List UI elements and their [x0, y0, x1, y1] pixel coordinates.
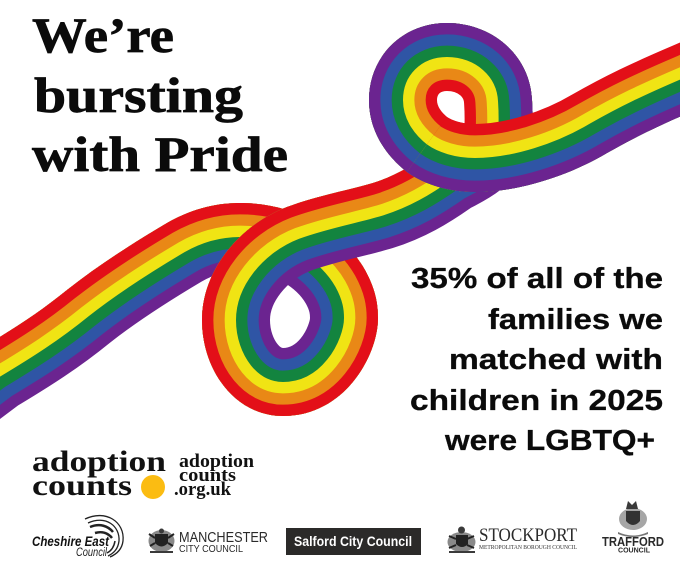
logo: Cheshire East Council [32, 516, 123, 559]
logo: Cheshire East Council: Cheshire East [32, 534, 109, 549]
website address: counts [179, 466, 236, 486]
icon: Trafford crest [618, 501, 648, 537]
logo: Manchester City Council: CITY COUNCIL [179, 543, 243, 555]
logo: Manchester City Council [148, 528, 268, 555]
logo: Trafford Council: COUNCIL [618, 548, 651, 554]
adoption counts logo [32, 445, 166, 502]
logo: Manchester City Council: MANCHESTER [179, 529, 268, 546]
statistic text: matched with [449, 344, 663, 376]
title: We’re [32, 7, 174, 63]
logo: Trafford Council: TRAFFORD [602, 534, 664, 549]
adoption counts logo: counts [32, 469, 132, 502]
statistic text: 35% of all of the [411, 263, 663, 295]
website address [174, 452, 255, 500]
website address: .org.uk [174, 480, 232, 500]
logo: Salford City Council: Salford City Council [294, 534, 412, 549]
rainbow ribbon [0, 23, 680, 416]
logo: Stockport Metropolitan Borough Council [448, 525, 577, 553]
icon: wheat swoosh [85, 516, 123, 557]
logo: Stockport Metropolitan Borough Council: STOCKPORT [479, 525, 577, 546]
logo: Salford City Council [286, 528, 421, 555]
title: bursting [34, 67, 243, 123]
logo: Trafford Council [602, 501, 664, 554]
website address: adoption [179, 452, 255, 472]
logo: Stockport Metropolitan Borough Council: METROPOLITAN BOROUGH COUNCIL [479, 544, 577, 551]
statistic text: families we [488, 304, 663, 336]
logo: Cheshire East Council: Council [76, 547, 107, 559]
icon: Stockport crest [448, 526, 476, 553]
title [32, 7, 288, 182]
title: with Pride [32, 126, 288, 182]
icon: yellow dot [141, 475, 165, 499]
statistic text: were LGBTQ+ [444, 425, 655, 457]
adoption counts logo: adoption [32, 445, 166, 478]
statistic text: children in 2025 [410, 385, 663, 417]
statistic text [410, 263, 663, 457]
icon: Manchester crest [148, 528, 174, 553]
